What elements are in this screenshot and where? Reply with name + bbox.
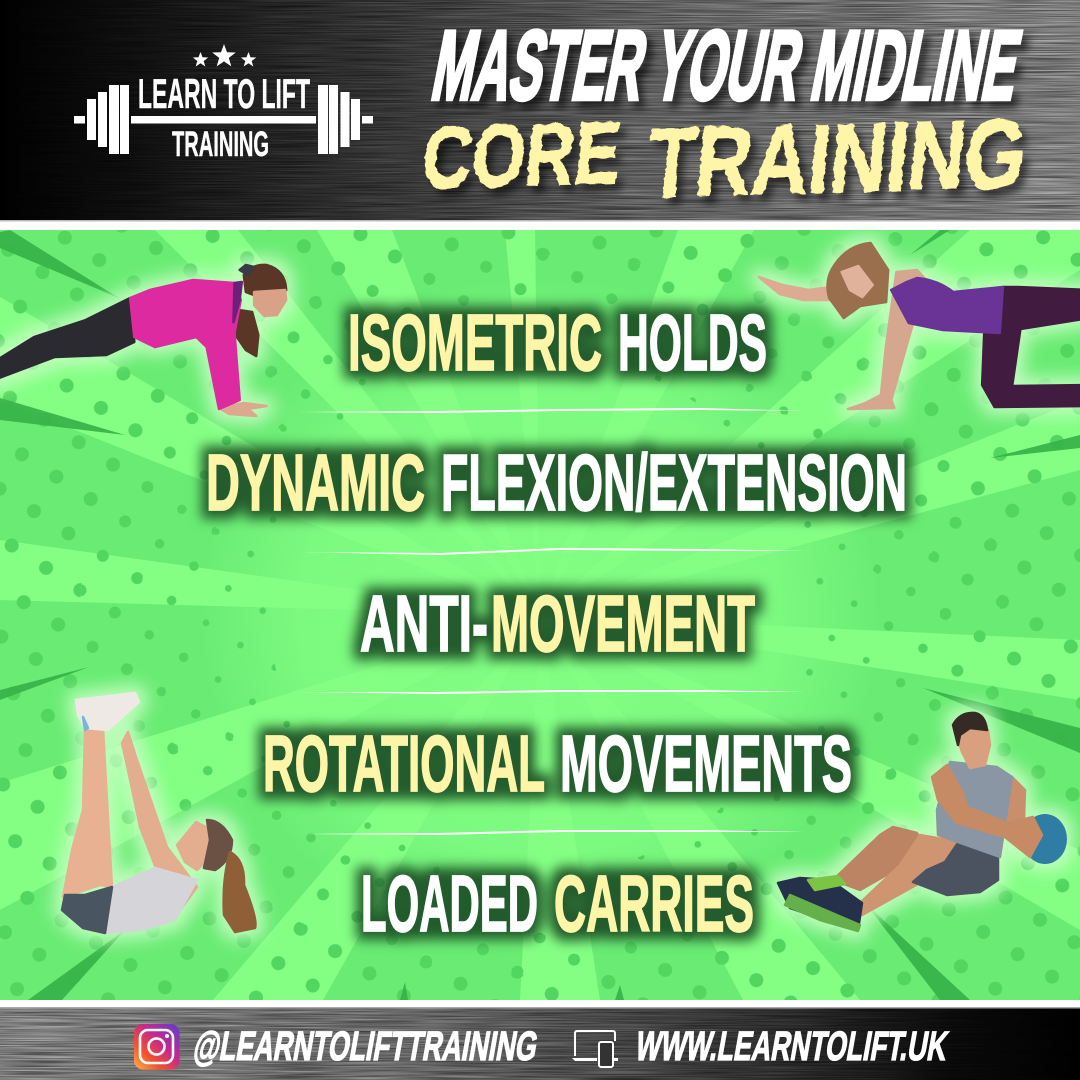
logo: Learn to Lift Training: LEARN TO LIFT xyxy=(138,70,310,117)
person: v-up, white tank xyxy=(62,693,256,933)
icon: laptop and phone xyxy=(572,1031,618,1067)
footer text: instagram handle: @LEARNTOLIFTTRAINING xyxy=(190,1023,541,1069)
item: anti-movement: MOVEMENT xyxy=(491,579,755,668)
person: seated twist with medicine ball xyxy=(778,713,1067,931)
item: rotational movements: ROTATIONAL xyxy=(263,719,545,808)
logo: Learn to Lift Training: TRAINING xyxy=(172,125,269,164)
item: isometric holds: HOLDS xyxy=(618,298,767,387)
item: anti-movement xyxy=(360,579,755,668)
title: Core Training: CORE xyxy=(418,103,626,207)
logo: Learn to Lift Training xyxy=(74,44,373,164)
item: dynamic flexion/extension: DYNAMIC xyxy=(206,438,425,527)
list: core training categories xyxy=(206,298,907,948)
item: isometric holds: ISOMETRIC xyxy=(348,298,602,387)
item: rotational movements: MOVEMENTS xyxy=(560,719,852,808)
item: dynamic flexion/extension xyxy=(206,438,907,527)
title: Core Training xyxy=(418,98,1031,218)
item: loaded carries: CARRIES xyxy=(554,859,754,948)
item: anti-movement: ANTI- xyxy=(360,579,488,668)
icon: instagram xyxy=(134,1024,180,1070)
item: loaded carries: LOADED xyxy=(361,859,538,948)
panel: footer metal band xyxy=(0,1007,1080,1080)
person: bird dog, purple top xyxy=(759,243,1080,409)
panel: header metal band xyxy=(0,0,1080,222)
panel: green burst background xyxy=(0,230,1080,1000)
person: plank, pink top xyxy=(0,265,286,416)
